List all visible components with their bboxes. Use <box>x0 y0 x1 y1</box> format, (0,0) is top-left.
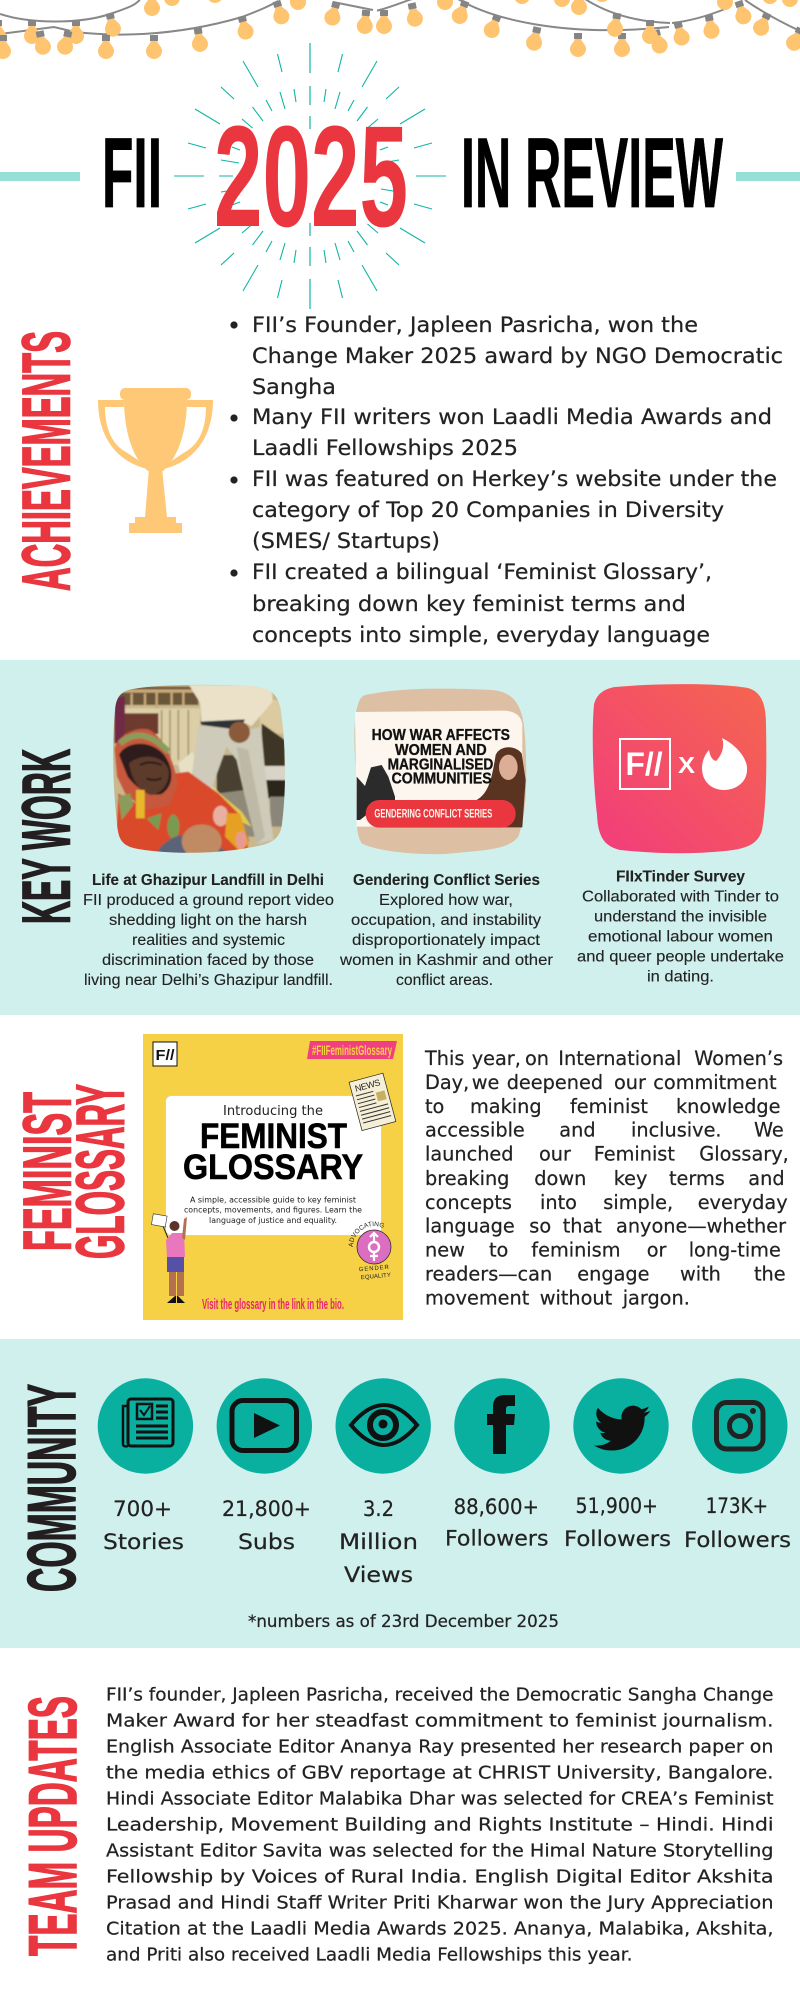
team updates paragraph: Prasad and Hindi Staff Writer Priti Kharwar won the Jury Appreciation <box>106 1894 774 1914</box>
sunburst <box>174 43 446 309</box>
glossary paragraph: Glossary, <box>699 1143 789 1166</box>
team updates paragraph: Assistant Editor Savita was selected for the Himal Nature Storytelling <box>106 1842 774 1862</box>
glossary paragraph: down <box>534 1167 586 1190</box>
heading: feminist glossary <box>10 1084 138 1259</box>
team updates paragraph: the media ethics of GBV reportage at CHRIST University, Bangalore. <box>106 1764 774 1784</box>
glossary paragraph: This <box>424 1047 464 1070</box>
image: gendering conflict series card: WOMEN AND <box>395 742 487 759</box>
image: FII x Tinder: X <box>678 752 696 778</box>
glossary poster: A simple, accessible guide to key feminist <box>190 1196 356 1205</box>
image: gendering conflict series card: MARGINALISED <box>388 756 493 773</box>
glossary paragraph: to <box>425 1095 444 1118</box>
glossary paragraph: we <box>472 1071 499 1094</box>
glossary paragraph: our <box>614 1071 646 1094</box>
glossary paragraph: or <box>647 1239 666 1262</box>
glossary paragraph: long-time <box>689 1239 781 1262</box>
team updates paragraph: Fellowship by Voices of Rural India. English Digital Editor Akshita <box>106 1868 774 1888</box>
text: tinder survey: and queer people undertake <box>577 949 784 966</box>
glossary poster: Visit the glossary in the link in the bio. <box>202 1297 344 1313</box>
glossary paragraph: Feminist <box>594 1143 675 1166</box>
title: FII <box>102 117 162 228</box>
glossary paragraph: breaking <box>425 1167 509 1190</box>
image: gendering conflict series card: GENDERING CONFLICT SERIES <box>374 807 492 821</box>
glossary paragraph: engage <box>577 1263 650 1286</box>
text: tinder survey: understand the invisible <box>594 909 767 926</box>
text: GLOSSARY <box>62 1084 138 1259</box>
text: gendering conflict: occupation, and instability <box>351 912 541 929</box>
text: gendering conflict: Gendering Conflict Series <box>353 872 540 889</box>
text: gendering conflict: conflict areas. <box>396 972 493 989</box>
icon: video <box>217 1378 312 1474</box>
title <box>0 96 800 257</box>
text: Ghazipur landfill: realities and systemic <box>132 932 285 949</box>
glossary paragraph: to <box>489 1239 508 1262</box>
glossary paragraph: our <box>539 1143 571 1166</box>
achievements list: Change Maker 2025 award by NGO Democratic <box>252 344 783 368</box>
text: tinder survey: Collaborated with Tinder to <box>582 889 779 906</box>
panel: key work <box>0 660 800 1015</box>
text: Ghazipur landfill: shedding light on the harsh <box>109 912 307 929</box>
achievements list: FII was featured on Herkey’s website under the <box>252 467 777 491</box>
team updates paragraph: FII’s founder, Japleen Pasricha, received the Democratic Sangha Change <box>106 1686 774 1706</box>
glossary poster: language of justice and equality. <box>209 1216 337 1225</box>
glossary poster: Introducing the <box>223 1104 323 1119</box>
glossary paragraph: so <box>529 1215 551 1238</box>
glossary paragraph: accessible <box>425 1119 525 1142</box>
icon: stories <box>98 1378 193 1474</box>
community stats: Million <box>339 1530 418 1554</box>
glossary paragraph: and <box>748 1167 785 1190</box>
text: tinder survey: in dating. <box>647 969 714 986</box>
image: gendering conflict series card <box>354 689 526 854</box>
team updates paragraph <box>106 1686 774 1966</box>
glossary paragraph: that <box>563 1215 602 1238</box>
glossary poster: EQUALITY <box>361 1273 391 1281</box>
community stats: 173K+ <box>706 1494 768 1518</box>
glossary paragraph: new <box>425 1239 465 1262</box>
string lights <box>0 0 800 59</box>
text: KEY WORK <box>8 749 84 924</box>
glossary paragraph: International <box>558 1047 681 1070</box>
icon: instagram <box>692 1378 788 1474</box>
icon: twitter <box>573 1378 669 1474</box>
glossary paragraph: knowledge <box>676 1095 781 1118</box>
glossary paragraph: deepened <box>507 1071 603 1094</box>
achievements list: Laadli Fellowships 2025 <box>252 436 518 460</box>
text: tinder survey: emotional labour women <box>588 929 773 946</box>
glossary paragraph: the <box>754 1263 786 1286</box>
community stats: 88,600+ <box>454 1495 539 1519</box>
glossary poster: GENDER <box>359 1265 390 1273</box>
footnote: *numbers as of 23rd December 2025 <box>248 1612 559 1631</box>
achievements list: FII created a bilingual ‘Feminist Glossary’, <box>252 560 712 584</box>
team updates paragraph: Citation at the Laadli Media Awards 2025. Ananya, Malabika, Akshita, <box>106 1920 774 1940</box>
icon: trophy <box>98 388 213 533</box>
glossary poster: concepts, movements, and figures. Learn the <box>184 1206 362 1215</box>
community stats: Stories <box>103 1530 184 1554</box>
text: gendering conflict <box>339 872 553 989</box>
glossary paragraph: everyday <box>698 1191 788 1214</box>
community stats: Followers <box>684 1528 791 1552</box>
heading: feminist glossary: FEMINIST <box>10 1092 86 1251</box>
glossary poster: FEMINIST <box>200 1117 347 1156</box>
glossary paragraph: feminism <box>531 1239 621 1262</box>
icon: eye <box>336 1378 431 1474</box>
text: Ghazipur landfill: discrimination faced by those <box>102 952 314 969</box>
community stats: 21,800+ <box>222 1497 311 1521</box>
glossary paragraph: with <box>680 1263 721 1286</box>
glossary paragraph: launched <box>425 1143 514 1166</box>
glossary paragraph: jargon. <box>622 1287 690 1310</box>
glossary paragraph: making <box>470 1095 542 1118</box>
team updates paragraph: Leadership, Movement Building and Rights Institute – Hindi. Hindi <box>106 1816 774 1836</box>
glossary paragraph: inclusive. <box>631 1119 722 1142</box>
text: Ghazipur landfill: Life at Ghazipur Landfill in Delhi <box>92 872 324 889</box>
community stats: 51,900+ <box>576 1494 658 1518</box>
glossary poster: F// <box>156 1047 175 1064</box>
glossary paragraph <box>424 1047 789 1310</box>
glossary paragraph: commitment <box>653 1071 777 1094</box>
community stats: 700+ <box>113 1497 172 1521</box>
image: gendering conflict series card: HOW WAR AFFECTS <box>372 727 510 744</box>
glossary poster: ADVOCATING <box>348 1222 384 1248</box>
text: Ghazipur landfill: living near Delhi’s Ghazipur landfill. <box>84 972 333 989</box>
achievements list <box>230 313 783 647</box>
team updates paragraph: and Priti also received Laadli Media Fellowships this year. <box>106 1946 632 1966</box>
glossary poster: NEWS <box>354 1077 381 1094</box>
glossary paragraph: simple, <box>603 1191 673 1214</box>
glossary poster <box>143 1034 403 1320</box>
text: Ghazipur landfill <box>83 872 334 989</box>
community stats: 3.2 <box>363 1497 394 1521</box>
achievements list: concepts into simple, everyday language <box>252 623 710 647</box>
glossary paragraph: Women’s <box>694 1047 783 1070</box>
text: tinder survey: FIIxTinder Survey <box>616 869 745 886</box>
title: 2025 <box>214 96 408 257</box>
achievements list: breaking down key feminist terms and <box>252 592 686 616</box>
glossary paragraph: terms <box>669 1167 725 1190</box>
image: FII x Tinder <box>593 684 766 853</box>
glossary paragraph: on <box>525 1047 549 1070</box>
text: tinder survey <box>577 869 784 986</box>
team updates paragraph: Maker Award for her steadfast commitment to feminist journalism. <box>106 1712 774 1732</box>
glossary paragraph: anyone—whether <box>616 1215 786 1238</box>
glossary paragraph: feminist <box>570 1095 648 1118</box>
text: COMMUNITY <box>14 1384 90 1592</box>
image: gendering conflict series card: COMMUNITIES <box>392 770 492 787</box>
panel: community <box>0 1339 800 1648</box>
achievements list: Sangha <box>252 375 336 399</box>
text: ACHIEVEMENTS <box>8 331 84 591</box>
community stats: Views <box>344 1563 413 1587</box>
text: gendering conflict: disproportionately impact <box>352 932 541 949</box>
glossary paragraph: into <box>540 1191 577 1214</box>
text: TEAM UPDATES <box>15 1696 91 1956</box>
team updates paragraph: Hindi Associate Editor Malabika Dhar was selected for CREA’s Feminist <box>106 1790 774 1810</box>
glossary paragraph: Day, <box>425 1071 469 1094</box>
community stats: Followers <box>445 1527 548 1551</box>
achievements list: category of Top 20 Companies in Diversity <box>252 498 724 522</box>
glossary paragraph: readers—can <box>425 1263 552 1286</box>
glossary paragraph: key <box>614 1167 647 1190</box>
glossary paragraph: movement <box>425 1287 530 1310</box>
image: FII x Tinder: F// <box>626 746 663 782</box>
glossary paragraph: and <box>559 1119 596 1142</box>
achievements list: (SMES/ Startups) <box>252 529 440 553</box>
text: gendering conflict: Explored how war, <box>379 892 513 909</box>
photo: Ghazipur landfill <box>113 684 285 853</box>
glossary poster: #FIIFeministGlossary <box>312 1042 392 1058</box>
glossary paragraph: We <box>754 1119 784 1142</box>
community stats: Subs <box>238 1530 295 1554</box>
community stats <box>103 1494 791 1587</box>
team updates paragraph: English Associate Editor Ananya Ray presented her research paper on <box>106 1738 774 1758</box>
glossary poster: GLOSSARY <box>183 1148 363 1187</box>
achievements list: Many FII writers won Laadli Media Awards and <box>252 405 772 429</box>
glossary paragraph: language <box>425 1215 515 1238</box>
icon: facebook <box>454 1378 550 1474</box>
glossary paragraph: without <box>540 1287 613 1310</box>
community stats: Followers <box>564 1527 671 1551</box>
glossary paragraph: concepts <box>425 1191 512 1214</box>
text: Ghazipur landfill: FII produced a ground report video <box>83 892 334 909</box>
glossary paragraph: year, <box>472 1047 521 1070</box>
text: gendering conflict: women in Kashmir and other <box>339 952 553 969</box>
achievements list: FII’s Founder, Japleen Pasricha, won the <box>252 313 698 337</box>
